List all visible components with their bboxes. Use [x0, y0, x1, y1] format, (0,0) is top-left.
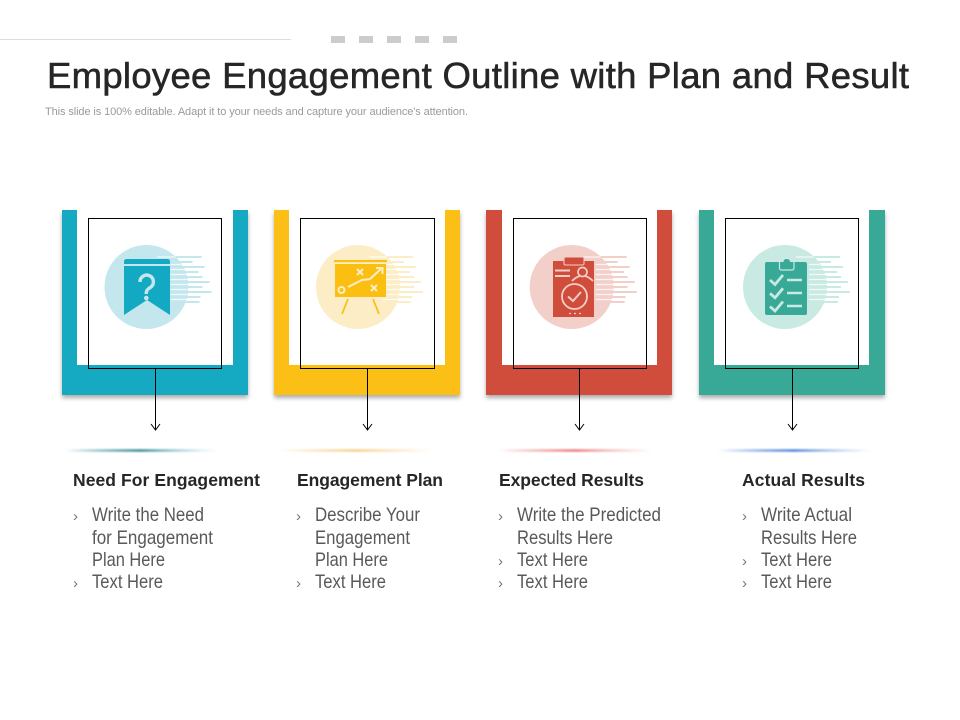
bullet list: Text Here — [517, 549, 588, 571]
outlined box — [514, 218, 646, 368]
subtitle: This slide is 100% editable. Adapt it to your needs and capture your audience's attention. — [45, 106, 468, 118]
bullet list — [742, 504, 857, 593]
arrow — [575, 368, 584, 430]
panel: actual results — [699, 205, 885, 593]
bullet list: Text Here — [92, 571, 163, 593]
heading: Expected Results — [499, 470, 644, 490]
arrow — [788, 368, 797, 430]
bullet list — [498, 504, 661, 593]
bullet list: Text Here — [517, 571, 588, 593]
bullet list — [73, 504, 213, 593]
icon: checklist — [743, 245, 850, 329]
bullet list: Results Here — [517, 527, 613, 549]
green U frame — [699, 205, 885, 395]
teal U frame — [62, 205, 248, 395]
outlined box — [88, 218, 222, 368]
bullet list: for Engagement — [92, 527, 213, 549]
heading: Need For Engagement — [73, 470, 260, 490]
bullet list: › — [296, 508, 301, 525]
arrow — [363, 368, 372, 430]
icon: question bookmark — [104, 245, 212, 329]
bullet list: Text Here — [761, 549, 832, 571]
panel: need for engagement — [62, 205, 260, 593]
panel: expected results — [486, 205, 672, 593]
bullet list: Plan Here — [315, 549, 388, 571]
bullet list: Text Here — [761, 571, 832, 593]
heading: Engagement Plan — [297, 470, 443, 490]
outlined box — [300, 218, 434, 368]
bullet list: Plan Here — [92, 549, 165, 571]
bullet list: › — [73, 508, 78, 525]
title: Employee Engagement Outline with Plan and Result — [47, 55, 909, 96]
outlined box — [726, 218, 858, 368]
yellow U frame — [274, 205, 460, 395]
gradient divider — [65, 449, 217, 452]
bullet list: › — [498, 553, 503, 570]
gradient divider — [278, 449, 432, 452]
bullet list: Write the Predicted — [517, 504, 661, 526]
bullet list: › — [296, 575, 301, 592]
icon: presentation board — [316, 245, 423, 329]
bullet list: › — [742, 575, 747, 592]
bullet list: › — [742, 553, 747, 570]
bullet list: Write the Need — [92, 504, 204, 526]
arrow — [151, 368, 160, 430]
panel: engagement plan — [274, 205, 460, 593]
bullet list: › — [498, 575, 503, 592]
bullet list: › — [73, 575, 78, 592]
red U frame — [486, 205, 672, 395]
bullet list: Describe Your — [315, 504, 420, 526]
bullet list: Write Actual — [761, 504, 852, 526]
bullet list: Results Here — [761, 527, 857, 549]
gradient divider — [718, 449, 871, 452]
bullet list: Engagement — [315, 527, 410, 549]
gradient divider — [498, 449, 652, 452]
header decorative squares — [331, 36, 457, 43]
bullet list: › — [498, 508, 503, 525]
icon: clipboard with check — [530, 245, 637, 329]
bullet list: › — [742, 508, 747, 525]
heading: Actual Results — [742, 470, 865, 490]
bullet list: Text Here — [315, 571, 386, 593]
bullet list — [296, 504, 420, 593]
